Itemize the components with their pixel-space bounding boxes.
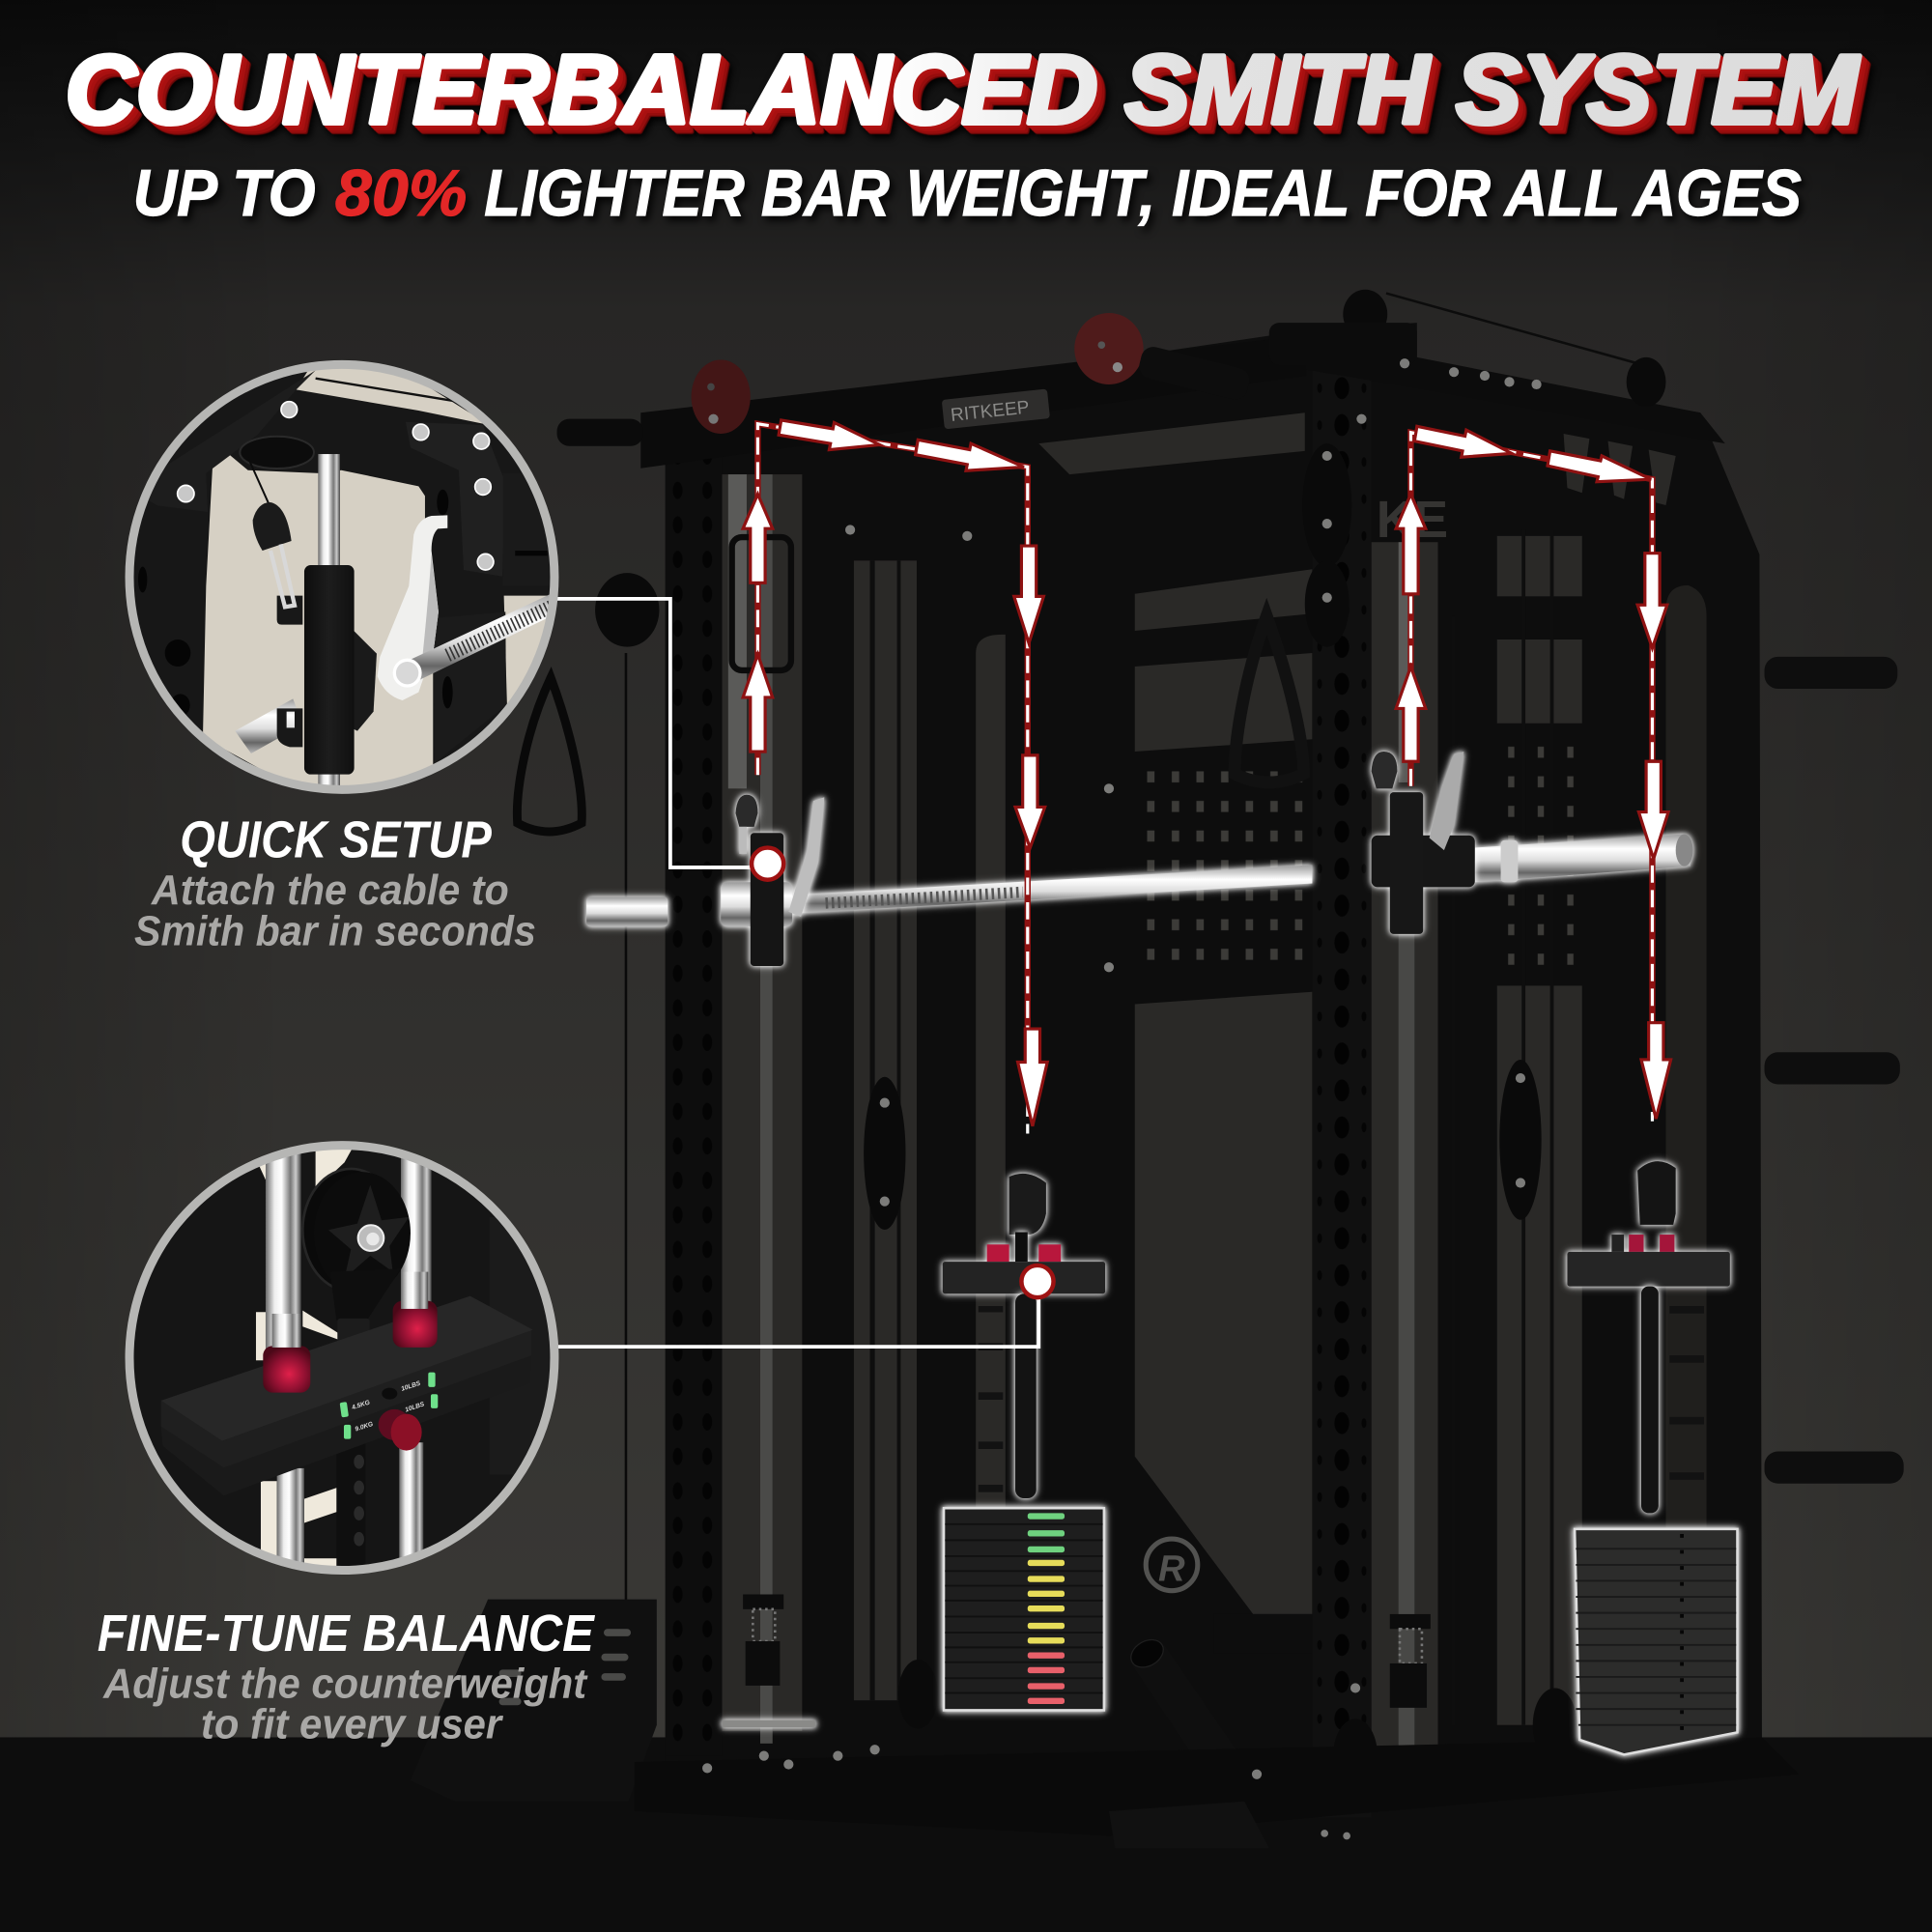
red pin knob: [379, 1409, 422, 1451]
red pulley plates: [692, 313, 1144, 434]
ring: [129, 1146, 554, 1571]
mid pulleys: [595, 443, 1577, 1793]
cream gaps: [256, 1148, 353, 1581]
red collars: [263, 1301, 438, 1393]
top side beam: [1306, 323, 1725, 443]
carabiner: [270, 544, 295, 607]
subtitle: LIGHTER BAR WEIGHT, IDEAL FOR ALL AGES: [484, 157, 1802, 230]
ring: [129, 364, 554, 789]
fine-tune description: Adjust the counterweight: [102, 1662, 588, 1708]
weight labels: 4.5KG: [350, 1400, 371, 1411]
title: COUNTERBALANCED SMITH SYSTEM: [66, 37, 1861, 145]
frame silhouette: [666, 330, 1762, 1824]
right foot: [1109, 1802, 1269, 1848]
handle left: [517, 678, 582, 832]
bracket: [277, 708, 302, 747]
handle centre: [1235, 616, 1303, 782]
weight labels: 10LBS: [404, 1401, 426, 1413]
right selector rod: [1641, 1287, 1659, 1513]
left spring stop: [743, 1595, 783, 1686]
fine-tune description: to fit every user: [201, 1702, 503, 1748]
weight labels: 10LBS: [400, 1380, 422, 1393]
counterweight plate: [161, 1296, 533, 1495]
frame holes: [138, 490, 453, 717]
sliding sleeve block: [304, 565, 355, 775]
smith bar right: [1475, 835, 1693, 882]
pulley wheel: [301, 1167, 411, 1287]
weight labels: [340, 1373, 438, 1439]
floor: [0, 1737, 1932, 1932]
quick setup description: Smith bar in seconds: [134, 908, 536, 954]
left selector rod: [1015, 1293, 1037, 1498]
stack colour tabs: [1028, 1513, 1065, 1704]
smith bar knurled: [394, 592, 560, 686]
sleeve: [235, 698, 302, 753]
upright stripes: [728, 474, 1553, 1775]
stack plate seams: [945, 1524, 1103, 1693]
plate slots: [499, 1629, 631, 1705]
chrome guide rod: [318, 454, 340, 570]
hex bolts: [178, 402, 494, 570]
frame details: [213, 371, 315, 469]
right pegs: [1765, 657, 1904, 1484]
cable: [249, 462, 270, 502]
quick setup description: [134, 867, 536, 954]
rear gusset and logo: R: [1158, 1548, 1185, 1589]
arrows left path: [743, 420, 1047, 1126]
subtitle: 80%: [335, 157, 467, 230]
white hook: [378, 515, 447, 700]
cable path right: [1410, 433, 1652, 1122]
right stack seams: [1576, 1548, 1736, 1725]
right selector pulley: [1637, 1161, 1676, 1225]
base rail: [635, 1737, 1799, 1836]
rear logo lettering: KE: [1377, 492, 1448, 549]
left sleeve: [586, 897, 668, 926]
fine-tune description: [102, 1662, 588, 1748]
brand plate: [942, 389, 1050, 429]
arrows right path: [1396, 426, 1671, 1119]
left selector pulley: [1009, 1174, 1046, 1235]
quick setup heading: QUICK SETUP: [180, 812, 492, 869]
left weight stack: [944, 1508, 1104, 1710]
subtitle: UP TO: [133, 157, 316, 230]
right spring stop: [1390, 1614, 1431, 1708]
quick setup description: Attach the cable to: [151, 867, 509, 914]
right weight stack: [1575, 1529, 1737, 1754]
cable ferrule: [253, 502, 292, 551]
silver frame bolts: [702, 358, 1542, 1839]
foot plate left: [411, 1600, 657, 1802]
right carriage: [1372, 752, 1475, 934]
marker dot: counterweight: [1021, 1265, 1054, 1297]
right stack pin holes: [1681, 1534, 1684, 1740]
bottom highlight: [722, 1720, 815, 1727]
cable path left: [757, 424, 1028, 1133]
leader line: quick setup: [557, 599, 766, 867]
weight labels: 9.0KG: [355, 1421, 374, 1433]
inset circle: counterweight adjuster: [123, 1140, 563, 1581]
perforated stem: [336, 1455, 364, 1566]
brand plate: RITKEEP: [950, 398, 1031, 426]
lower cross beam: [1213, 1614, 1312, 1654]
rear gusset and logo: [1146, 1539, 1198, 1591]
left counterweight plate: [943, 1233, 1105, 1293]
D bracket: [732, 537, 791, 670]
gym rack frame: [411, 290, 1904, 1848]
perforated uprights: [666, 431, 722, 1756]
inset circle: bar cable attachment: [123, 357, 563, 799]
pegboard panels: [1140, 764, 1306, 974]
smith bar left: [801, 865, 1312, 913]
left carriage: [721, 795, 824, 966]
plate stem: [337, 1319, 368, 1340]
marker dot: carriage: [752, 848, 783, 880]
right counterweight plate: [1567, 1235, 1730, 1287]
wall windows through frame: [722, 412, 1707, 1756]
vertical lettering blocks: [979, 1306, 1704, 1492]
fine-tune heading: FINE-TUNE BALANCE: [98, 1605, 596, 1662]
pulley: [240, 437, 314, 469]
left cable: [625, 653, 627, 1725]
top pulleys and cable: [557, 290, 1665, 446]
leader line: fine-tune: [557, 1282, 1038, 1347]
top front beam: [640, 335, 1306, 469]
chrome rods: [266, 1150, 301, 1355]
storage tube: [1126, 1634, 1244, 1786]
beige wall openings: [203, 360, 560, 792]
